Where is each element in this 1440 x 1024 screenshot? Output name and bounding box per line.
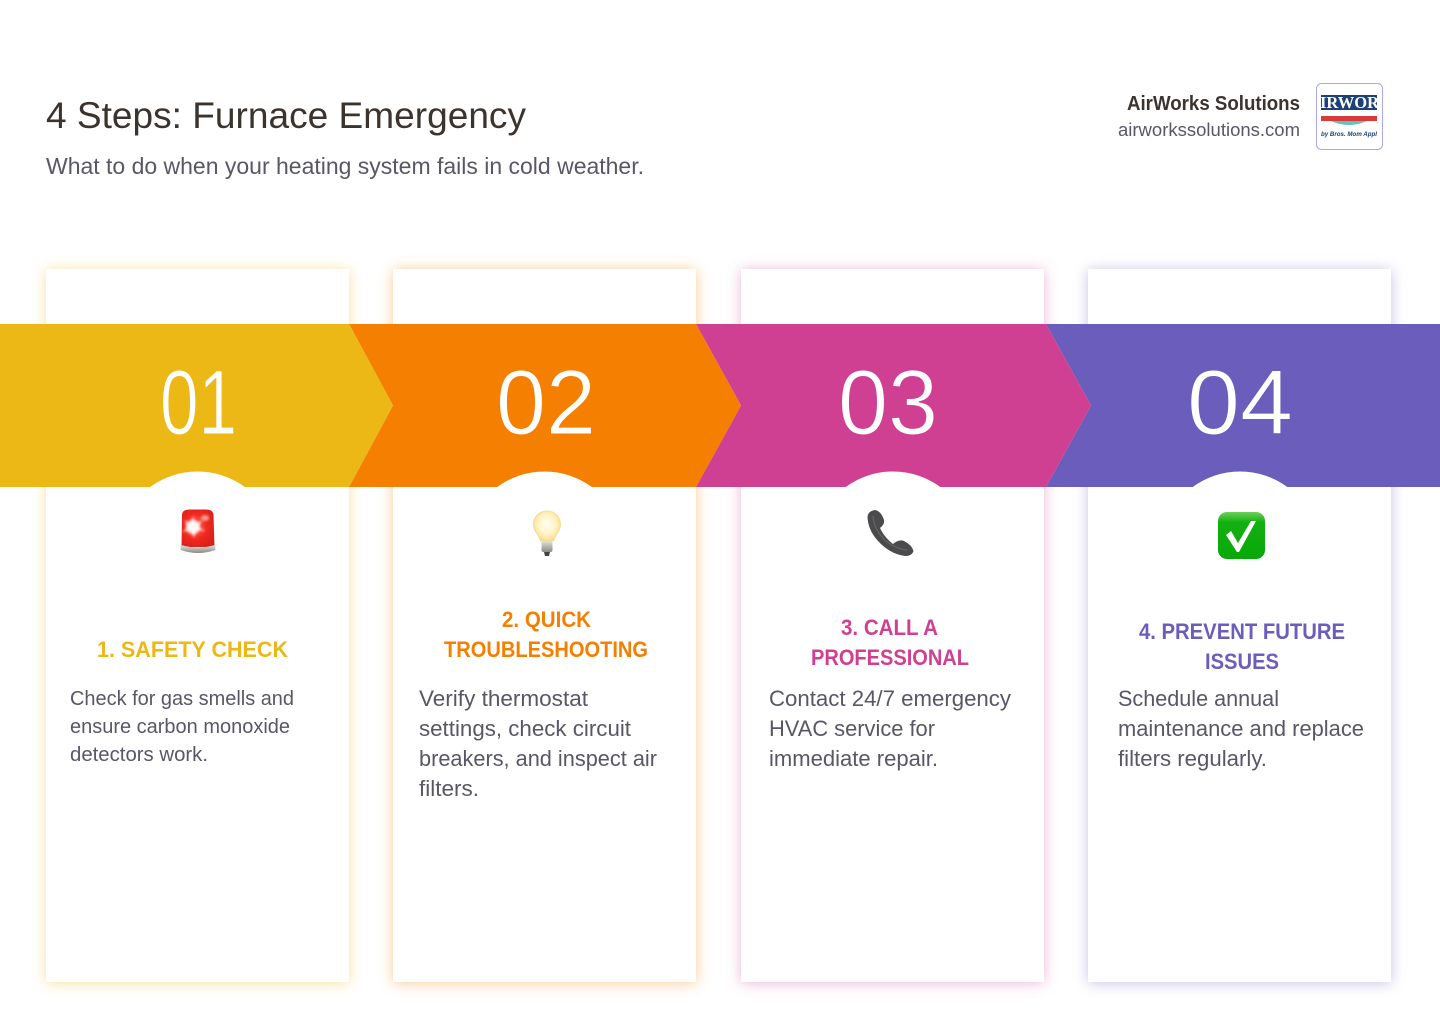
step 3 heading: PROFESSIONAL [811,645,969,670]
step 3 body: Contact 24/7 emergency [769,686,1012,711]
step 2 body: breakers, and inspect air [419,746,657,771]
step 2 heading: 2. QUICK [502,607,591,632]
step 2 body: filters. [419,776,479,801]
step 3 body: immediate repair. [769,746,938,771]
panel: step 2 card [393,269,696,982]
step 4 heading: 4. PREVENT FUTURE [1139,619,1345,644]
step 4 body [1118,686,1364,771]
step 2 body: Verify thermostat [419,686,589,711]
brand logo [1316,84,1392,150]
step 1 body: Check for gas smells and [70,687,294,710]
icon: siren [180,510,216,553]
panel: step 1 card [46,269,349,982]
step 2 heading: TROUBLESHOOTING [444,637,648,662]
arrow band: step 2 [349,324,741,487]
number 04: 04 [1187,352,1293,454]
panel: step 3 card [741,269,1044,982]
step 3 body [769,686,1012,771]
step 3 body: HVAC service for [769,716,935,741]
icon: light bulb [534,511,560,556]
icon circle: step 3 [845,472,941,488]
step 1 body [70,687,294,766]
step 1 body: ensure carbon monoxide [70,715,290,738]
step 3 heading [811,615,969,670]
brand block [1118,84,1392,150]
arrow band: step 3 [696,324,1091,487]
icon: telephone receiver [868,510,914,556]
number 03: 03 [838,352,938,454]
arrow band: step 4 [1046,324,1440,487]
header: title and subtitle [46,95,644,179]
step 1 body: detectors work. [70,743,208,766]
icon circle: step 2 [496,472,592,488]
step 4 body: filters regularly. [1118,746,1267,771]
brand name: AirWorks Solutions [1127,93,1300,115]
number 01: 01 [160,352,237,454]
step 2 heading [444,607,648,662]
panel: step 4 card [1088,269,1391,982]
step 3 heading: 3. CALL A [841,615,938,640]
brand logo: IRWORK [1320,93,1392,112]
number 02: 02 [496,352,596,454]
step 1 heading: 1. SAFETY CHECK [97,637,288,662]
arrow band: step 1 [0,324,393,487]
step 4 heading: ISSUES [1205,649,1279,674]
step 2 body [419,686,657,801]
step 2 body: settings, check circuit [419,716,632,741]
step 4 heading [1139,619,1345,674]
title: 4 Steps: Furnace Emergency [46,95,526,136]
brand website: airworkssolutions.com [1118,119,1300,140]
step 4 body: Schedule annual [1118,686,1279,711]
icon circle: step 1 [150,471,246,488]
icon circle: step 4 [1192,472,1288,488]
subtitle: What to do when your heating system fails in cold weather. [46,153,644,179]
brand logo: by Bros. Mom Appl [1321,131,1377,138]
step 4 body: maintenance and replace [1118,716,1364,741]
icon: check mark [1218,512,1265,559]
